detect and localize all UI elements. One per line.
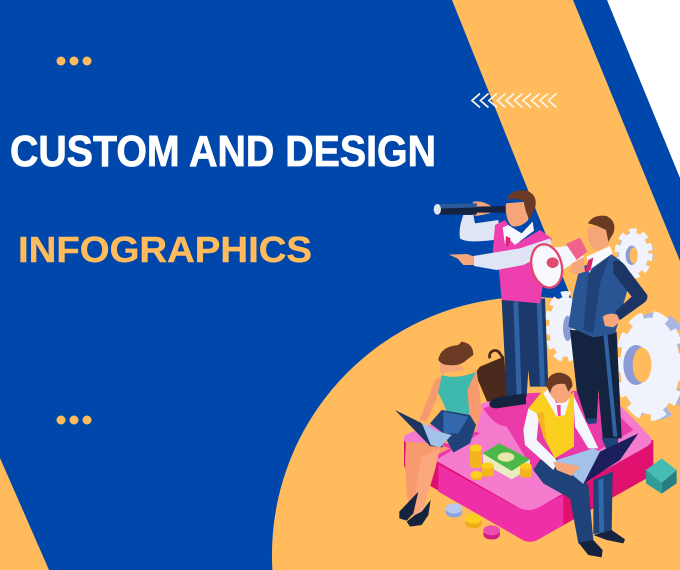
yellow vest [528, 390, 574, 458]
platform [404, 390, 653, 542]
hand on megaphone [571, 257, 585, 275]
loose coins [446, 503, 500, 539]
icon: briefcase [475, 350, 508, 408]
hand on hip [603, 314, 620, 327]
trousers [502, 298, 548, 397]
spyglass [434, 203, 505, 215]
legs [533, 458, 613, 543]
person: seated man with laptop [523, 373, 638, 557]
legs [405, 442, 450, 517]
icon: middle gear [548, 294, 584, 359]
top [436, 372, 477, 416]
pointing hand [449, 254, 474, 265]
megaphone [527, 238, 587, 291]
heels [399, 492, 431, 527]
collar and tie [587, 246, 613, 273]
title: CUSTOM AND DESIGN [10, 127, 436, 176]
person: woman with laptop [395, 342, 677, 539]
orange diagonal band [452, 0, 680, 400]
icon: teal cube [646, 458, 677, 494]
head [440, 360, 465, 373]
vest [493, 220, 552, 303]
far shoes [587, 418, 618, 450]
pointing arm [473, 238, 552, 270]
arms [419, 370, 482, 445]
bottom dots [56, 416, 92, 424]
head [587, 227, 610, 250]
collar [503, 222, 534, 245]
hand [553, 462, 580, 476]
spyglass arm [460, 215, 500, 241]
subtitle: INFOGRAPHICS [18, 229, 312, 270]
money [483, 443, 530, 479]
coin stacks [470, 444, 532, 480]
white arms [523, 395, 598, 470]
skirt [430, 410, 476, 453]
large orange circle [272, 297, 680, 570]
hair [506, 190, 536, 220]
top dots [56, 56, 92, 66]
head [506, 202, 528, 227]
hair [588, 216, 614, 242]
collar and tie [543, 388, 572, 417]
shoes [578, 530, 625, 557]
white top right corner [607, 0, 680, 178]
hair [546, 373, 572, 393]
icon: large gear [619, 315, 680, 417]
trousers [570, 330, 622, 438]
jacket [568, 253, 628, 337]
icon: small gear [617, 231, 650, 276]
chevron row [472, 94, 556, 108]
head [547, 383, 572, 403]
hair [438, 342, 473, 365]
laptop [395, 410, 452, 447]
jacket arm [613, 260, 647, 320]
shoes [489, 393, 526, 408]
illustration: business team [395, 190, 680, 557]
person: man with spyglass [434, 190, 552, 408]
orange bottom left triangle [0, 458, 49, 570]
laptop [555, 433, 638, 484]
vest shading [537, 412, 547, 442]
person: man with megaphone [527, 216, 647, 450]
